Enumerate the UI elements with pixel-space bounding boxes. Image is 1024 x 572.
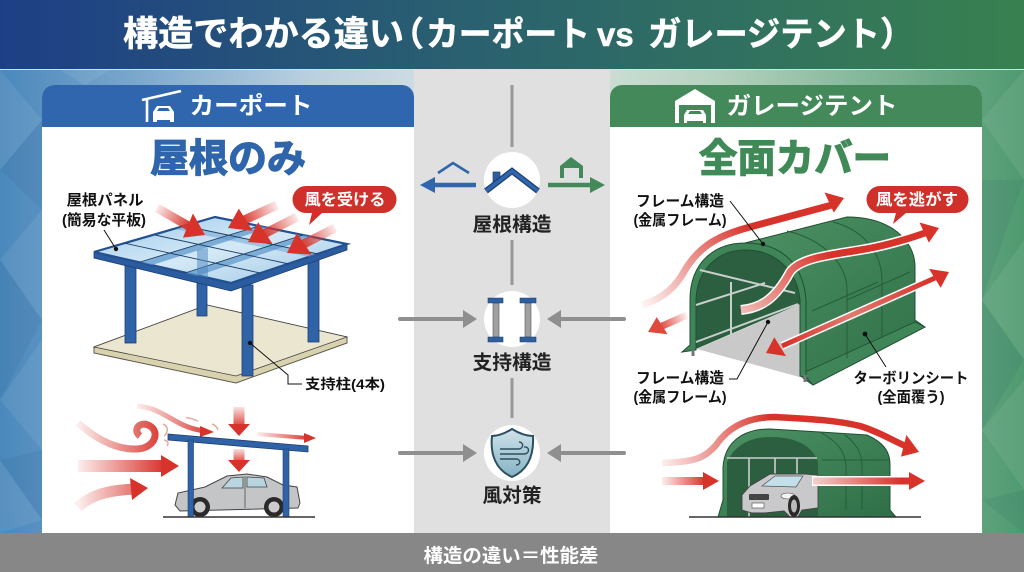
wind arrows tent front [662, 417, 925, 490]
heading: roof only: 屋根のみ [150, 138, 306, 181]
title bar: ガレージテント [648, 16, 880, 54]
tent front view: wind [662, 417, 925, 517]
icon: pillars [484, 291, 540, 347]
icon: roof [484, 152, 540, 208]
wind arrows left [78, 406, 218, 507]
label: frame structure bottom [634, 320, 770, 406]
tent interior [696, 250, 800, 349]
label: tarpaulin sheet: ターボリンシート [854, 370, 968, 387]
label: roof panel: 屋根パネル [66, 192, 144, 209]
callout: lets wind escape [867, 186, 968, 224]
header label: carport: カーポート [190, 93, 312, 120]
icon: carport [142, 91, 181, 122]
panel header: garage tent [610, 85, 982, 127]
label: support posts: 支持柱(4本) [305, 376, 385, 392]
title bar: ） [880, 16, 914, 54]
label: frame structure top: フレーム構造 [636, 192, 724, 210]
carport side view: wind [78, 406, 316, 517]
floor slab [94, 305, 347, 383]
roof panel [94, 244, 347, 291]
carport side structure [168, 434, 308, 452]
wind arrows on roof [157, 205, 335, 264]
title bar: 構造でわかる違い [123, 15, 404, 54]
wind arrows top [228, 407, 316, 472]
tent ribs [787, 222, 910, 358]
center column [414, 70, 610, 533]
label: support structure: 支持構造 [472, 352, 552, 374]
tent illustration [642, 187, 953, 385]
label: tarpaulin sheet [854, 332, 968, 406]
title bar: カーポート [426, 16, 590, 54]
title bar: vs [597, 16, 634, 53]
label: wind protection: 風対策 [482, 485, 542, 507]
callout: receives wind: 風を受ける [304, 190, 386, 209]
label: frame structure bottom: フレーム構造 [636, 369, 724, 387]
center connectors [510, 85, 514, 418]
label: tarpaulin sheet: (全面覆う) [878, 388, 944, 406]
comparison row: support structure [400, 291, 624, 374]
heading: full cover: 全面カバー [699, 138, 891, 181]
footer bar: 構造の違い＝性能差 [424, 544, 598, 567]
title bar: （ [390, 16, 424, 54]
car front [742, 474, 818, 517]
label: frame structure top [634, 192, 765, 246]
frame pipes [696, 270, 798, 342]
panel: carport [42, 85, 414, 533]
arrow: to tent [548, 157, 605, 193]
icon: garage [675, 89, 715, 123]
icon: wind shield [484, 425, 540, 481]
callout: lets wind escape: 風を逃がす [876, 190, 958, 209]
panel: garage tent [610, 85, 982, 533]
tent body front [718, 429, 896, 517]
comparison row: wind protection [400, 425, 624, 507]
carport illustration [94, 205, 347, 383]
arrows: wind [400, 444, 624, 462]
callout: receives wind [292, 186, 396, 225]
comparison row: roof structure [420, 152, 605, 236]
car [175, 474, 300, 517]
footer bar [0, 533, 1024, 572]
title bar [0, 0, 1024, 69]
label: frame structure top: (金属フレーム) [634, 211, 726, 229]
panel header: carport [42, 85, 414, 127]
arrow: to carport [420, 163, 476, 193]
header label: garage tent: ガレージテント [726, 93, 898, 120]
label: roof panel: (簡易な平板) [62, 211, 146, 229]
label: support posts [248, 341, 385, 392]
tent body [745, 217, 925, 385]
label: frame structure bottom: (金属フレーム) [634, 388, 726, 406]
label: roof panel [62, 192, 146, 251]
label: roof structure: 屋根構造 [472, 214, 552, 236]
wind arrows around tent [642, 187, 953, 363]
arrows: support [400, 310, 624, 328]
